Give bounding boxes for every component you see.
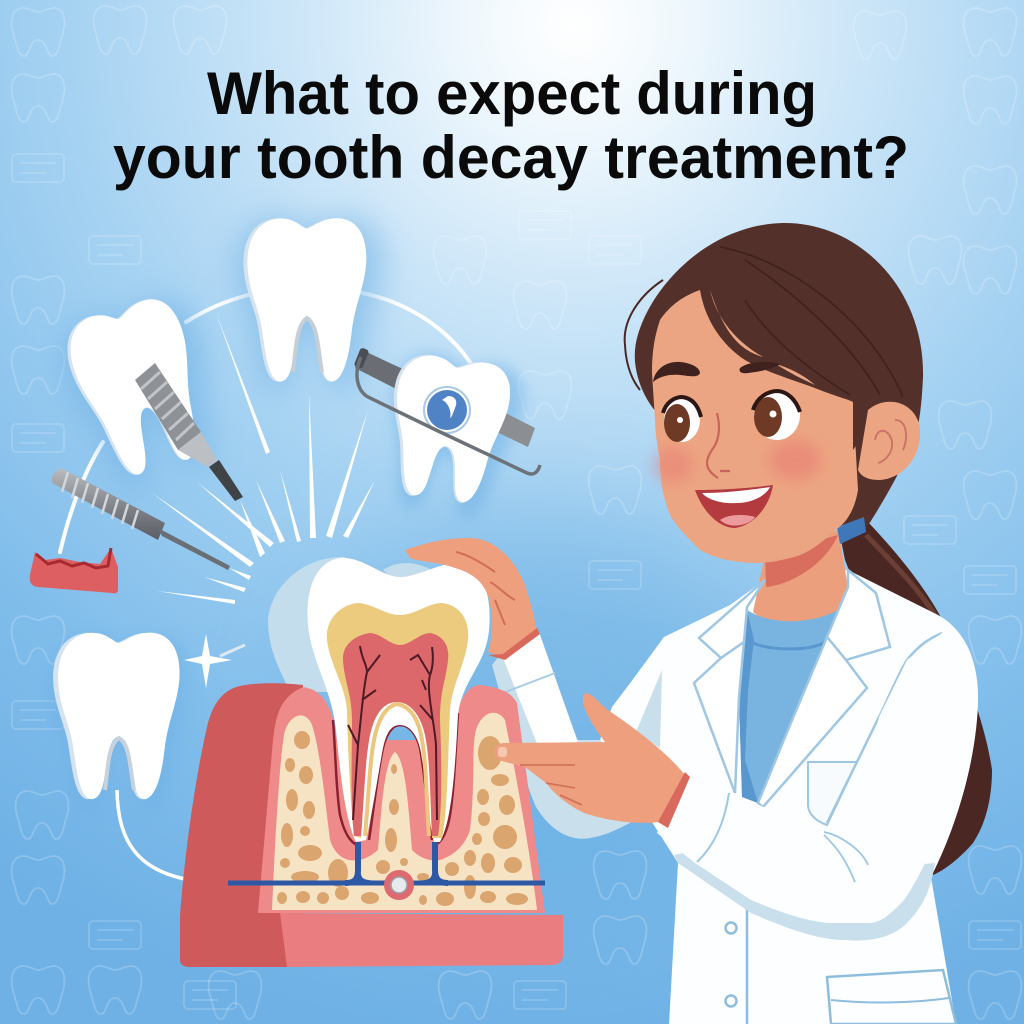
- raised arm shade: [492, 655, 640, 839]
- right eye: [753, 390, 800, 440]
- socket lines: [333, 713, 458, 845]
- sleeve of pointing arm: [657, 633, 978, 923]
- coat body: [600, 570, 978, 1024]
- raised arm sleeve: [503, 632, 578, 746]
- dentist head: [625, 223, 923, 563]
- icon: left tooth with handpiece: [52, 291, 243, 501]
- scrub collar: [751, 642, 824, 649]
- icon: right tooth with instrument: [354, 347, 540, 525]
- cuff: [658, 772, 690, 828]
- gum section: [258, 685, 545, 913]
- title: What to expect during: [207, 60, 817, 127]
- icon: top tooth: [237, 218, 383, 394]
- left eyebrow: [653, 362, 700, 382]
- dentist body: [492, 520, 992, 1024]
- pointing hand: [494, 693, 690, 828]
- bone: [272, 713, 537, 910]
- hair sliver: [710, 290, 763, 357]
- nerves: [348, 646, 437, 820]
- hair strands: [720, 247, 903, 397]
- cheeks: [653, 447, 693, 483]
- elbow creases: [824, 832, 868, 882]
- bottom pocket: [827, 970, 956, 1024]
- raised hand on tooth: [405, 538, 540, 660]
- right eyebrow: [739, 362, 780, 373]
- connecting arc: [60, 292, 479, 552]
- pulp chamber: [343, 633, 448, 836]
- flyaway strand: [625, 280, 663, 390]
- scrub dark edge: [739, 610, 830, 803]
- yellow inner stripe: [365, 704, 429, 836]
- mouth: [695, 485, 773, 528]
- coat buttons: [726, 922, 736, 1006]
- gum back block: [180, 683, 303, 967]
- coat side shade: [636, 670, 662, 748]
- icon: gum piece: [30, 548, 118, 593]
- nose: [707, 413, 730, 478]
- title: [113, 60, 909, 191]
- icon: dental drill: [52, 468, 230, 570]
- face: [652, 290, 858, 563]
- bracelet: [488, 628, 540, 660]
- ear: [858, 402, 920, 480]
- connector line from tooth to diagram: [117, 790, 228, 883]
- icon: bottom-left tooth: [49, 633, 190, 810]
- icon: sparkle: [184, 634, 245, 688]
- nerve node: [384, 870, 414, 900]
- halo behind tooth: [268, 557, 440, 692]
- blood vessels: [228, 842, 545, 883]
- gum base: [280, 913, 563, 967]
- rays: [152, 313, 375, 604]
- left eye: [663, 397, 701, 442]
- bone spots: [277, 731, 528, 906]
- pocket line: [831, 998, 949, 1002]
- fringe: [700, 232, 923, 450]
- cuff seam: [697, 793, 729, 862]
- right lapel: [758, 637, 867, 807]
- left lapel: [694, 642, 744, 793]
- sleeve seam: [503, 673, 555, 693]
- sleeve shadow: [674, 840, 935, 940]
- neck shadow: [765, 535, 838, 587]
- hair back: [635, 223, 923, 530]
- chest pocket: [808, 762, 857, 825]
- scrub shirt: [739, 610, 838, 803]
- right upper collar: [827, 570, 890, 660]
- left upper collar: [699, 580, 765, 658]
- hair tie: [837, 517, 866, 544]
- ponytail: [838, 520, 992, 875]
- tooth cross-section diagram: [180, 557, 563, 967]
- dentine layer: [327, 603, 468, 838]
- placket line: [746, 888, 748, 1024]
- neck: [753, 530, 848, 624]
- tooth crown and roots: [307, 558, 490, 842]
- title: your tooth decay treatment?: [113, 124, 909, 191]
- arm seam: [827, 633, 942, 823]
